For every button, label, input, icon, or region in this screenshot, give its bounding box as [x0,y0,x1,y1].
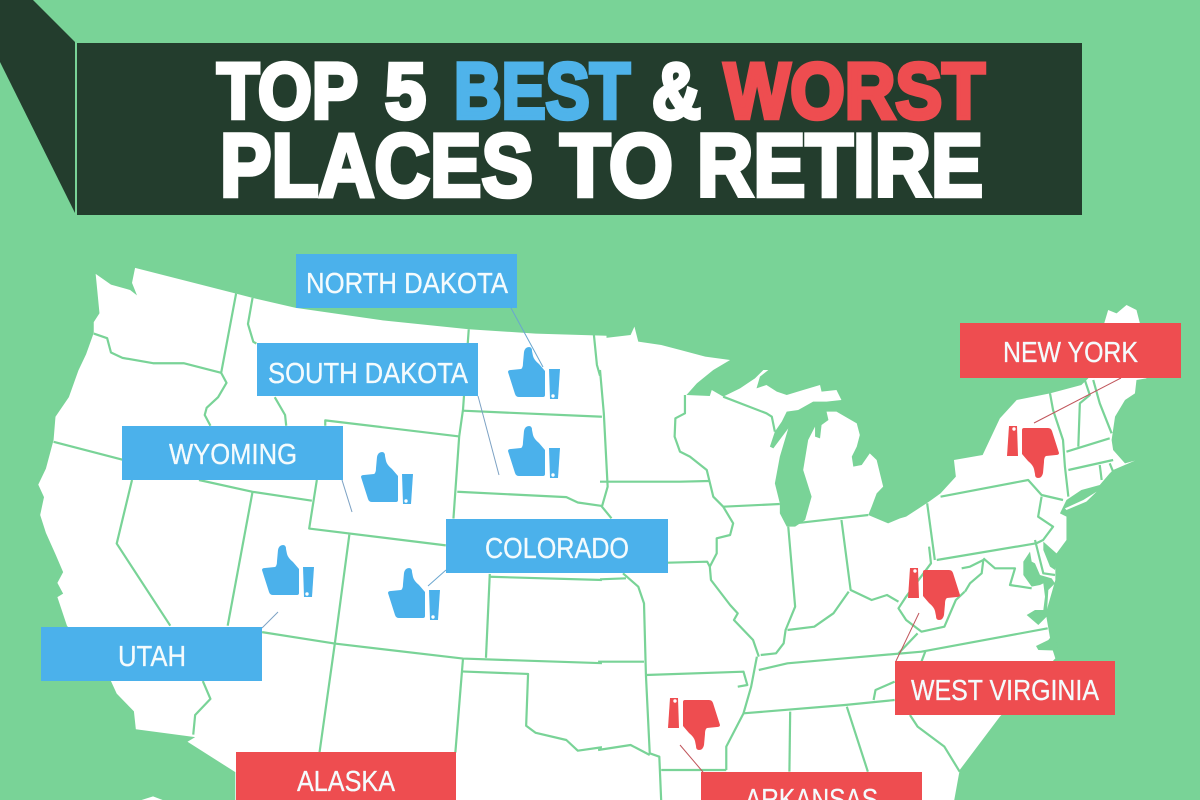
title: first line: & [652,47,701,135]
label: Wyoming [122,426,343,480]
icon: thumbs up, Wyoming [361,452,413,504]
label: West Virginia: WEST VIRGINIA [911,675,1100,707]
title banner [0,0,1082,215]
label: Alaska [236,752,456,800]
leader lines [262,308,1121,772]
label: North Dakota [296,254,517,308]
label: Alaska: ALASKA [297,766,396,798]
title: second line: PLACES [220,115,533,215]
label: New York: NEW YORK [1003,337,1139,369]
map: western half [38,268,607,800]
title: first line [217,47,985,135]
label: Arkansas [701,772,922,800]
label: Utah [41,627,262,681]
title: second line: RETIRE [697,115,983,215]
map: Chesapeake and mid-Atlantic detail [962,540,1058,651]
map: eastern half [598,305,1146,800]
label: South Dakota: SOUTH DAKOTA [268,358,469,390]
title: first line: 5 [385,47,426,135]
icon: thumbs up, North Dakota [508,347,560,399]
icon: thumbs up, Utah [262,545,314,597]
label: South Dakota [257,343,478,396]
title: first line: BEST [454,47,630,135]
label: Colorado [446,519,668,573]
US map [38,268,1146,800]
icon: thumbs up, South Dakota [508,426,560,478]
label: Wyoming: WYOMING [169,439,297,471]
icon: thumbs down, New York [1007,426,1059,478]
icon: thumbs up, Colorado [388,568,440,620]
label: West Virginia [895,661,1115,715]
title: first line: WORST [724,47,985,135]
label: Colorado: COLORADO [485,533,629,565]
title: second line: TO [560,115,673,215]
label: New York [960,323,1181,378]
icon: thumbs down, Arkansas [668,698,720,750]
icon: thumbs down, West Virginia [908,568,960,620]
label: Utah: UTAH [118,641,186,673]
label: North Dakota: NORTH DAKOTA [306,268,509,300]
title: second line [220,115,983,215]
title: first line: TOP [217,47,358,135]
